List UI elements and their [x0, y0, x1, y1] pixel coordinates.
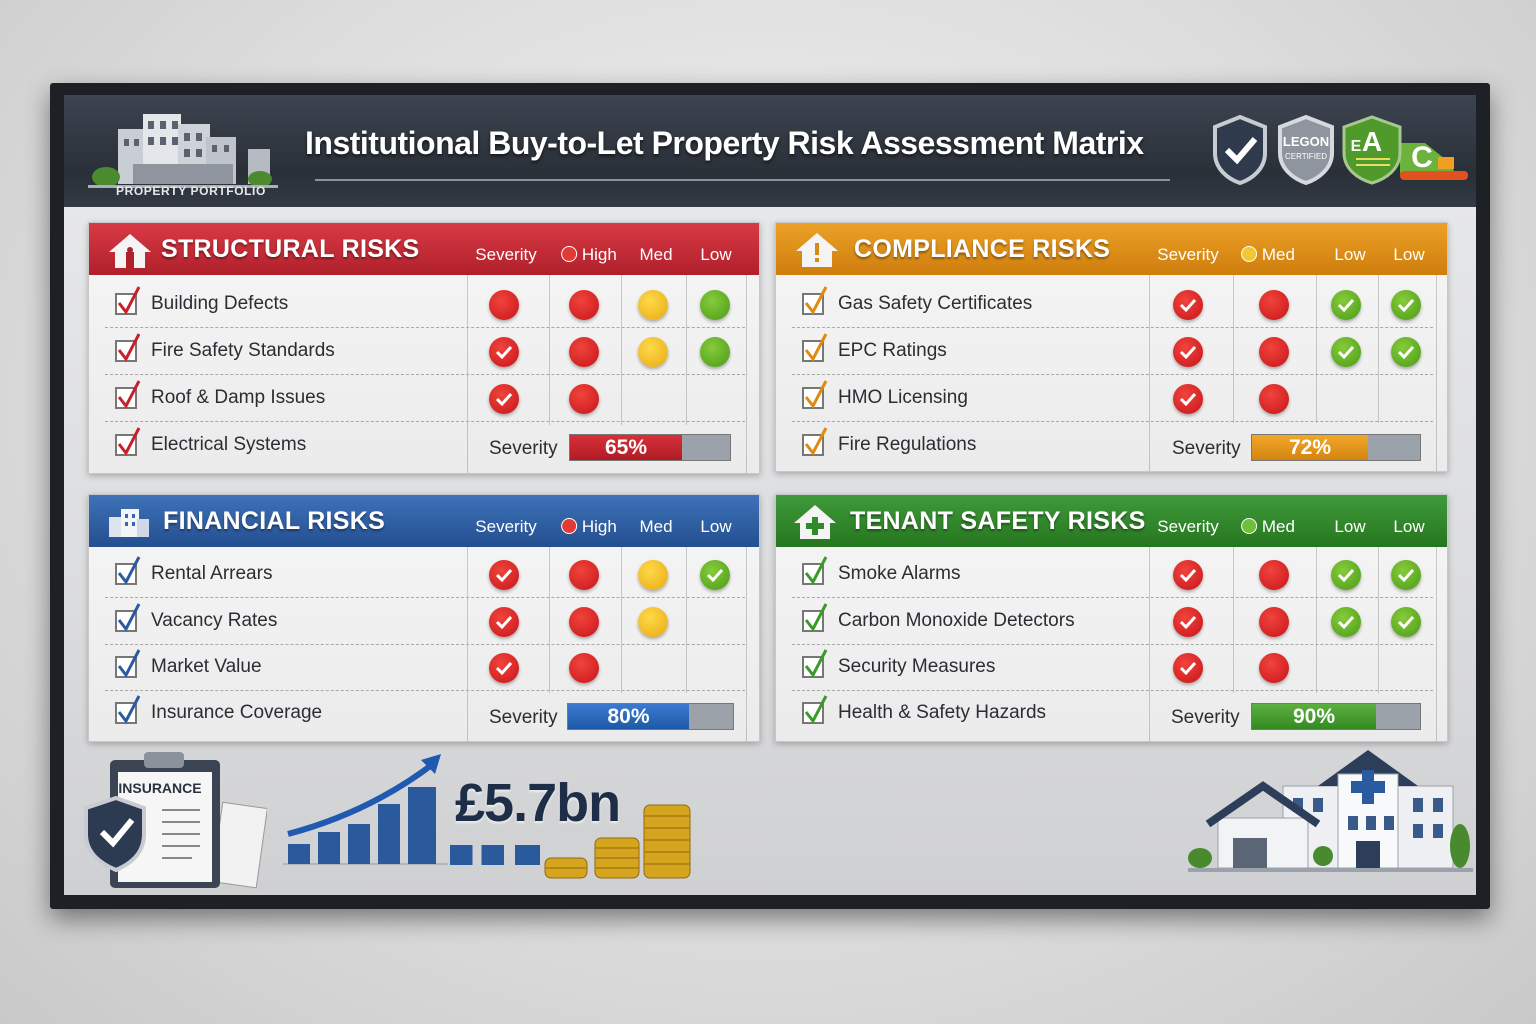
- icon: houses and hospital: [1188, 750, 1473, 872]
- panel header: financial: FINANCIAL RISKS: [163, 507, 385, 535]
- severity bar 80%: Severity: [489, 707, 558, 728]
- rows: Smoke Alarms: [838, 563, 960, 584]
- icon: insurance clipboard with shield: INSURANCE: [118, 780, 202, 796]
- rows: Building Defects: [151, 293, 288, 314]
- icon: insurance clipboard with shield: [84, 752, 267, 888]
- rows: [792, 281, 1433, 328]
- rows: Rental Arrears: [151, 563, 272, 584]
- panel header: financial: [89, 495, 759, 547]
- badges: certification shields: C: [1411, 141, 1433, 174]
- logo: property portfolio: [88, 114, 278, 198]
- badges: certification shields: CERTIFIED: [1285, 152, 1327, 161]
- rows: [105, 551, 745, 598]
- panel: compliance risks: Fire Regulations: [838, 434, 976, 455]
- stat: £5.7bn: £5.7bn: [455, 773, 620, 833]
- severity bar 72%: Severity: [1172, 438, 1241, 459]
- panel header: structural: Low: [700, 245, 732, 264]
- panel header: structural: Med: [639, 245, 673, 264]
- badges: certification shields: E: [1351, 138, 1362, 155]
- panel: tenant safety risks: 90%: [1293, 705, 1335, 728]
- badges: certification shields: LEGON: [1283, 134, 1329, 149]
- panel: tenant safety risks: [775, 494, 1448, 742]
- panel header: tenant safety: [776, 495, 1447, 547]
- rows: [105, 281, 745, 328]
- panel: structural risks: 65%: [605, 436, 647, 459]
- severity bar 90%: Severity: [1171, 707, 1240, 728]
- panel: financial risks: Market Value: [151, 656, 262, 677]
- panel header: structural: High: [582, 245, 617, 264]
- panel: compliance risks: 72%: [1289, 436, 1331, 459]
- rows: [792, 551, 1433, 598]
- panel header: financial: Med: [639, 517, 673, 536]
- panel: financial risks: Vacancy Rates: [151, 610, 277, 631]
- badges: certification shields: A: [1362, 126, 1382, 157]
- panel header: structural: STRUCTURAL RISKS: [161, 235, 420, 263]
- panel header: compliance: Low: [1334, 245, 1366, 264]
- panel header: tenant safety: TENANT SAFETY RISKS: [850, 507, 1146, 535]
- panel header: compliance: Med: [1262, 245, 1295, 264]
- panel header: tenant safety: Low: [1393, 517, 1425, 536]
- panel: tenant safety risks: Health & Safety Hazards: [838, 702, 1046, 723]
- panel header: financial: Low: [700, 517, 732, 536]
- panel: compliance risks: HMO Licensing: [838, 387, 968, 408]
- rows: Gas Safety Certificates: [838, 293, 1032, 314]
- panel: tenant safety risks: Carbon Monoxide Detectors: [838, 610, 1075, 631]
- logo: property portfolio: PROPERTY PORTFOLIO: [116, 184, 266, 198]
- panel: financial risks: Insurance Coverage: [151, 702, 322, 723]
- panel header: compliance: COMPLIANCE RISKS: [854, 235, 1110, 263]
- panel header: tenant safety: Low: [1334, 517, 1366, 536]
- panel: tenant safety risks: Security Measures: [838, 656, 995, 677]
- panel: structural risks: Roof & Damp Issues: [151, 387, 325, 408]
- panel header: tenant safety: Med: [1262, 517, 1295, 536]
- severity bar 65%: Severity: [489, 438, 558, 459]
- panel: compliance risks: EPC Ratings: [838, 340, 947, 361]
- title: Institutional Buy-to-Let Property Risk Assessment Matrix: [305, 125, 1144, 161]
- panel header: tenant safety: Severity: [1157, 517, 1219, 536]
- panel header: compliance: Low: [1393, 245, 1425, 264]
- panel: financial risks: 80%: [607, 705, 650, 728]
- panel: structural risks: [88, 222, 760, 474]
- panel: financial risks: [88, 494, 760, 742]
- panel: structural risks: Fire Safety Standards: [151, 340, 335, 361]
- screen background: [64, 95, 1476, 895]
- chart bars small right: [450, 845, 540, 865]
- panel header: structural: [89, 223, 759, 275]
- panel: structural risks: Electrical Systems: [151, 434, 306, 455]
- icon: gold coins: [544, 804, 690, 878]
- panel header: compliance: Severity: [1157, 245, 1219, 264]
- panel: compliance risks: [775, 222, 1448, 472]
- header bar: [64, 95, 1476, 207]
- badges: certification shields: [1213, 114, 1468, 186]
- panel header: structural: Severity: [475, 245, 537, 264]
- chart: rising bars with arrow: [283, 754, 448, 864]
- frame: [50, 83, 1490, 909]
- panel header: compliance: [776, 223, 1447, 275]
- panel header: financial: High: [582, 517, 617, 536]
- panel header: financial: Severity: [475, 517, 537, 536]
